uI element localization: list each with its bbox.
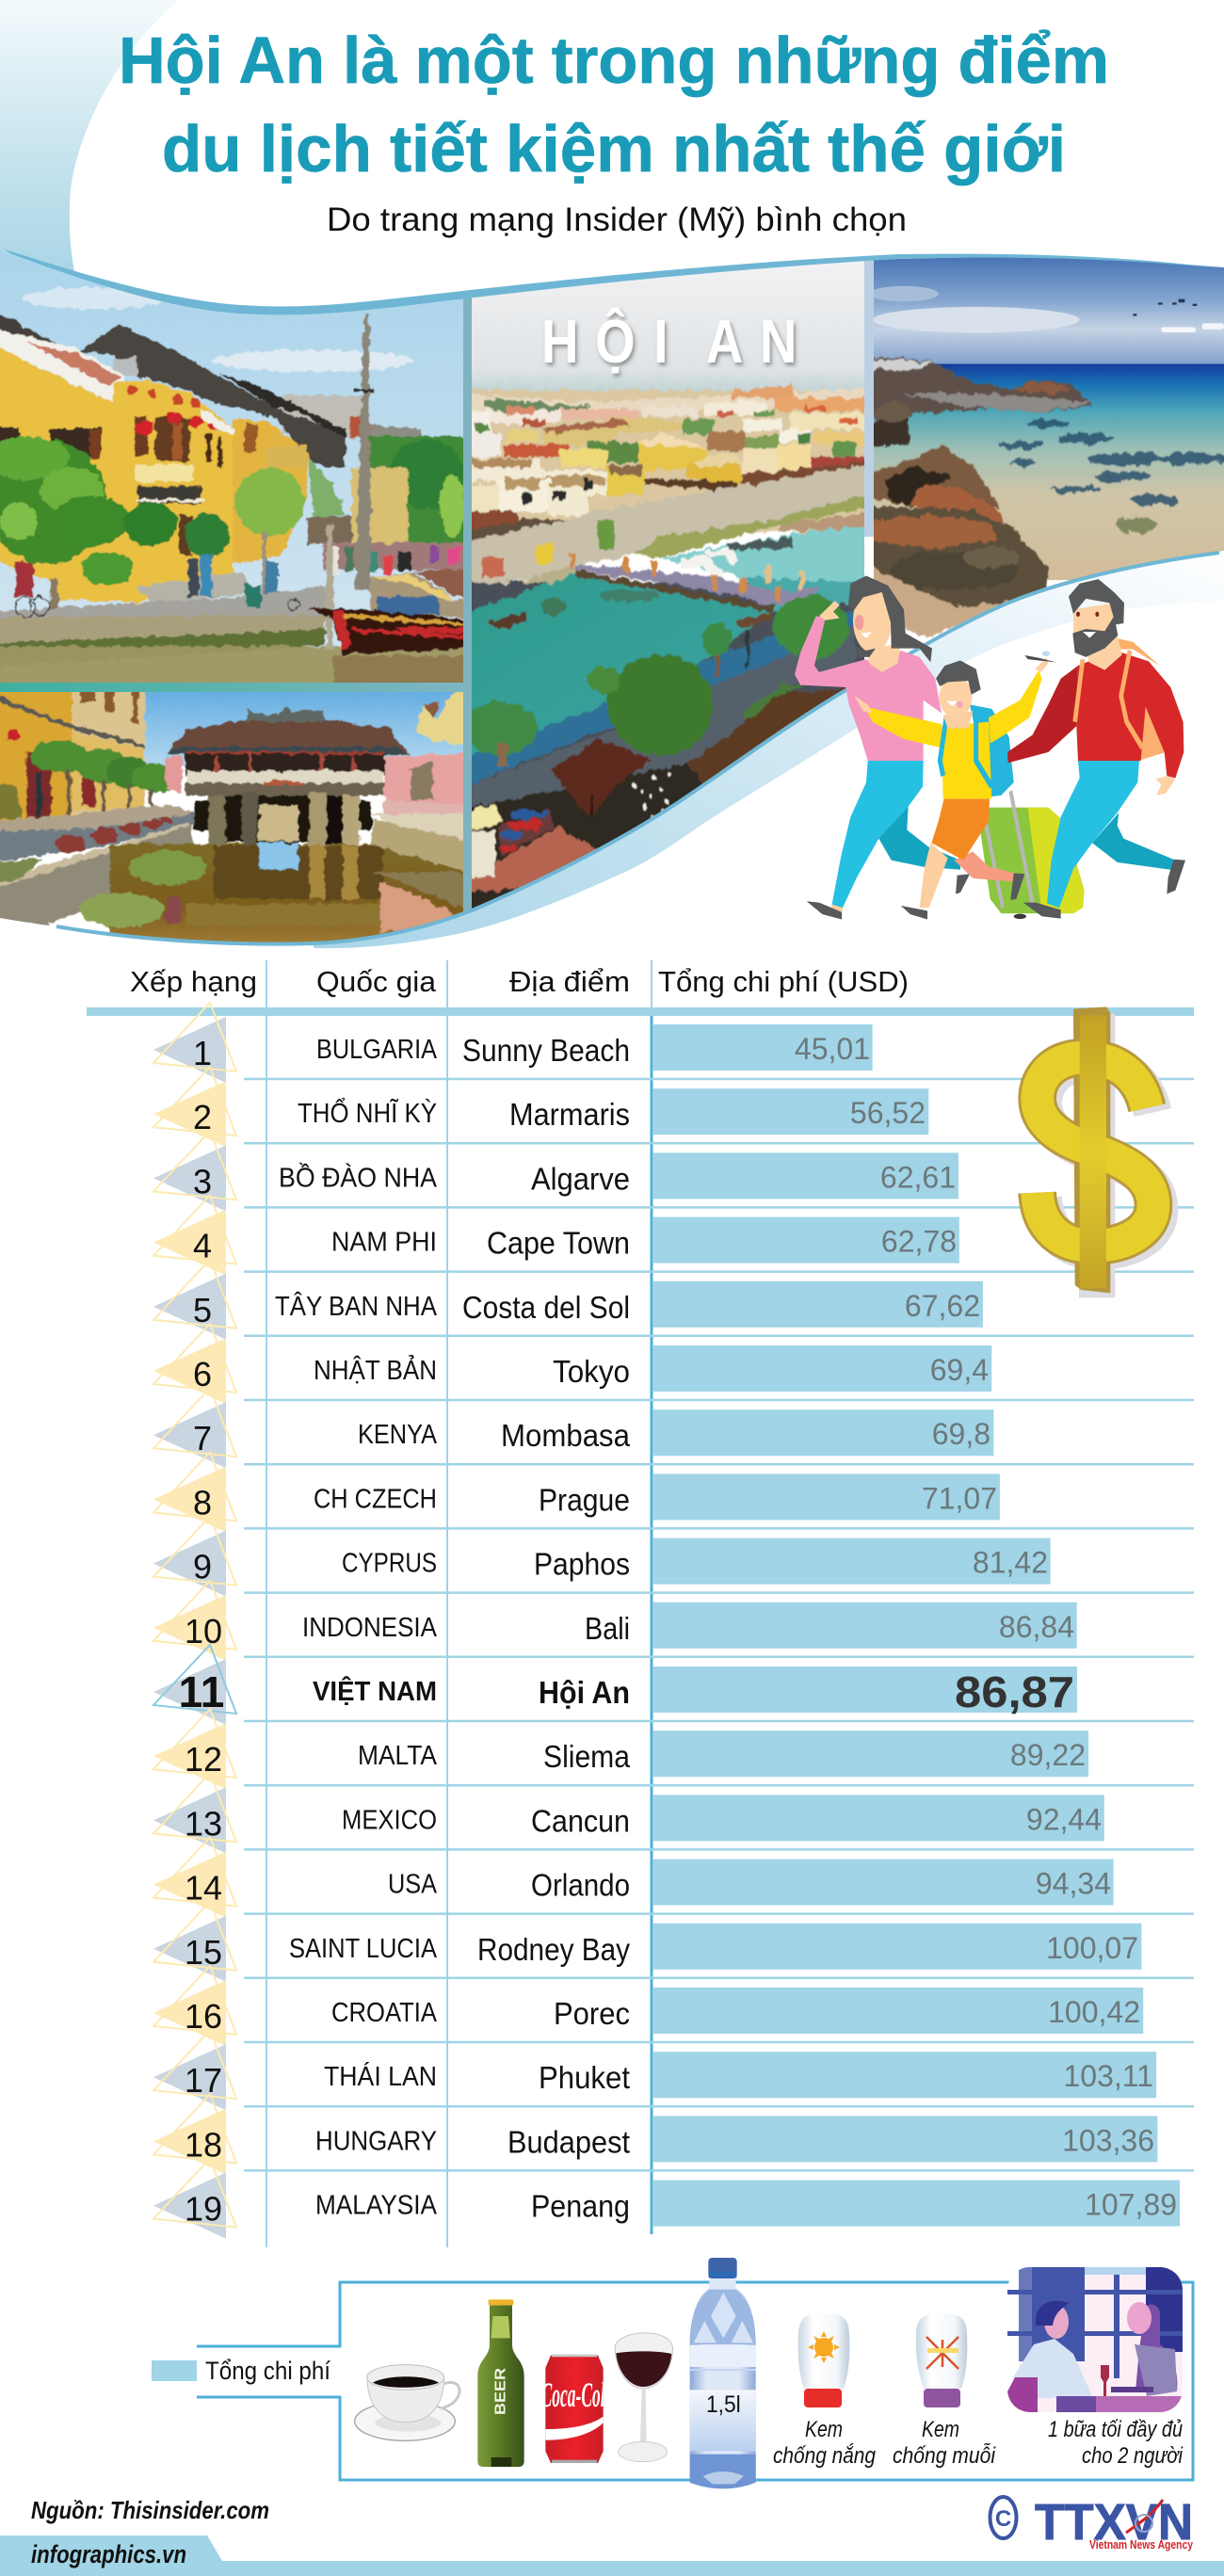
row 18 Hungary: Budapest [507, 2124, 630, 2159]
label: mosquito repellent: chống muỗi [893, 2442, 996, 2469]
basket icons [355, 2258, 756, 2488]
label: mosquito repellent: Kem [922, 2417, 959, 2442]
top-left gradient corner [0, 0, 179, 276]
label: dinner: cho 2 người [1082, 2443, 1184, 2469]
row 5 Spain: TÂY BAN NHA [275, 1291, 438, 1322]
basket icons: Coca-Cola [541, 2376, 613, 2415]
row 3 Portugal: BỒ ĐÀO NHA [279, 1161, 438, 1193]
row 17 Thailand: Phuket [539, 2060, 630, 2095]
icon: soda can [545, 2354, 604, 2463]
row 15 Saint Lucia: 100,07 [1046, 1931, 1138, 1965]
row 3 Portugal: 3 [193, 1162, 212, 1200]
row 17 Thailand: THÁI LAN [324, 2061, 437, 2092]
row 7 Kenya: KENYA [358, 1420, 438, 1450]
logo: TTXVN: TTXVN [1035, 2494, 1193, 2551]
row 3 Portugal [153, 1131, 958, 1211]
website credit: infographics.vn [31, 2540, 186, 2568]
icon: gold dollar sign [1038, 1006, 1159, 1297]
row 18 Hungary: HUNGARY [315, 2126, 437, 2156]
row 6 Japan: NHẬT BẢN [314, 1354, 437, 1386]
row 6 Japan: Tokyo [553, 1354, 630, 1389]
source credit: Nguồn: Thisinsider.com [31, 2496, 269, 2524]
row 7 Kenya: Mombasa [501, 1418, 631, 1453]
row 16 Croatia: CROATIA [331, 1998, 438, 2028]
row 7 Kenya: 7 [193, 1419, 212, 1457]
row 4 South Africa: NAM PHI [331, 1228, 437, 1258]
row 5 Spain: 5 [193, 1291, 212, 1329]
row 11 Viet Nam highlighted [153, 1645, 1077, 1725]
row 7 Kenya [153, 1388, 993, 1468]
row 17 Thailand [153, 2030, 1156, 2110]
row 1 Bulgaria: 1 [193, 1034, 212, 1072]
row 4 South Africa: Cape Town [487, 1226, 630, 1261]
row 15 Saint Lucia [153, 1902, 1141, 1982]
row 13 Mexico: Cancun [531, 1803, 630, 1838]
row 1 Bulgaria: 45,01 [795, 1032, 870, 1066]
row 14 USA: 94,34 [1036, 1867, 1111, 1901]
row 2 Turkey: 2 [193, 1098, 212, 1136]
row 4 South Africa [153, 1196, 959, 1276]
row 12 Malta: 12 [185, 1740, 222, 1779]
man traveller [1007, 579, 1185, 919]
icon: sunscreen tube [798, 2313, 849, 2407]
row 10 Indonesia: 86,84 [999, 1610, 1074, 1644]
photo gaps [0, 254, 874, 932]
photo: Japanese covered bridge [0, 684, 477, 951]
row 7 Kenya: 69,8 [932, 1417, 990, 1451]
row 8 Czech: 8 [193, 1483, 212, 1521]
table header: Tổng chi phí (USD) [658, 965, 909, 998]
row 19 Malaysia: 107,89 [1085, 2188, 1177, 2222]
label: dinner: 1 bữa tối đầy đủ [1048, 2417, 1183, 2442]
title: Hội An là một trong những điểm [119, 24, 1109, 97]
table header [130, 965, 909, 998]
row 5 Spain: Costa del Sol [462, 1290, 630, 1325]
legend swatch [152, 2360, 197, 2381]
row 8 Czech: CH CZECH [314, 1484, 437, 1514]
row 14 USA: 14 [185, 1869, 222, 1908]
row 5 Spain: 67,62 [905, 1289, 980, 1323]
row 6 Japan [153, 1324, 991, 1404]
legend frame [197, 2282, 1193, 2480]
child traveller [854, 651, 1056, 920]
row 8 Czech [153, 1452, 1000, 1532]
row 10 Indonesia: Bali [585, 1611, 630, 1646]
row 2 Turkey: 56,52 [850, 1096, 926, 1130]
logo: TTXVN: C [995, 2506, 1011, 2532]
row 15 Saint Lucia: Rodney Bay [477, 1932, 630, 1967]
family of travellers illustration [795, 575, 1185, 920]
top white wave [0, 0, 1224, 313]
row 6 Japan: 69,4 [930, 1353, 989, 1387]
row 12 Malta: Sliema [543, 1739, 631, 1774]
suitcase [981, 791, 1085, 919]
row 2 Turkey: Marmaris [509, 1097, 630, 1132]
row 10 Indonesia: INDONESIA [302, 1613, 438, 1643]
table header: Địa điểm [509, 965, 630, 998]
row 12 Malta: MALTA [358, 1741, 438, 1771]
row 10 Indonesia [153, 1581, 1077, 1661]
bottom curve band under photos [0, 551, 1224, 960]
label: sunscreen [773, 2417, 877, 2469]
label: sunscreen: chống nắng [773, 2443, 877, 2469]
row 10 Indonesia: 10 [185, 1612, 222, 1650]
label: mosquito repellent [893, 2417, 996, 2469]
row 9 Cyprus: CYPRUS [342, 1549, 437, 1579]
row 14 USA [153, 1838, 1114, 1918]
row 6 Japan: 6 [193, 1355, 212, 1393]
table frame [87, 960, 1194, 2247]
label: sunscreen: Kem [805, 2417, 843, 2442]
title: du lịch tiết kiệm nhất thế giới [162, 112, 1066, 185]
row 11 Viet Nam highlighted: 86,87 [955, 1667, 1074, 1716]
row 14 USA: USA [388, 1870, 438, 1900]
row 1 Bulgaria: BULGARIA [316, 1035, 438, 1065]
row 11 Viet Nam highlighted: VIỆT NAM [313, 1675, 437, 1707]
icon: beer bottle: BEER [493, 2368, 509, 2415]
row 1 Bulgaria: Sunny Beach [462, 1033, 630, 1068]
photo: aerial view of Hoi An river [459, 255, 878, 927]
row 11 Viet Nam highlighted: 11 [179, 1667, 224, 1716]
photo: rocky seashore [866, 247, 1224, 637]
row 16 Croatia: 100,42 [1048, 1995, 1140, 2029]
row 3 Portugal: 62,61 [880, 1160, 956, 1194]
row 19 Malaysia: 19 [185, 2190, 222, 2229]
row 13 Mexico: 92,44 [1026, 1802, 1102, 1836]
icon: beer bottle [477, 2299, 524, 2467]
icon: water bottle: 1,5l [706, 2391, 741, 2418]
row 3 Portugal: Algarve [531, 1161, 630, 1196]
row 12 Malta: 89,22 [1010, 1738, 1086, 1772]
row 9 Cyprus: Paphos [534, 1547, 630, 1582]
row 14 USA: Orlando [531, 1868, 630, 1903]
row 12 Malta [153, 1709, 1088, 1789]
row 15 Saint Lucia: 15 [185, 1933, 222, 1972]
row 18 Hungary: 103,36 [1062, 2123, 1154, 2157]
row 8 Czech: Prague [539, 1482, 630, 1517]
row 4 South Africa: 62,78 [881, 1225, 957, 1259]
row 17 Thailand: 17 [185, 2061, 222, 2100]
photo: Hoi An riverside street [0, 238, 483, 690]
row 19 Malaysia [153, 2159, 1180, 2239]
icon: dinner for two [1007, 2267, 1183, 2412]
row 17 Thailand: 103,11 [1064, 2059, 1153, 2093]
row 4 South Africa: 4 [193, 1227, 212, 1265]
footer band [0, 2536, 1224, 2576]
row 16 Croatia: Porec [554, 1996, 630, 2031]
row 9 Cyprus: 81,42 [973, 1546, 1048, 1580]
icon: water bottle [690, 2258, 756, 2488]
icon: coffee cup [355, 2365, 459, 2440]
row 18 Hungary [153, 2094, 1157, 2174]
legend label: Tổng chi phí [205, 2357, 330, 2385]
row 13 Mexico: MEXICO [342, 1805, 437, 1835]
row 2 Turkey [153, 1067, 928, 1147]
table header: Quốc gia [316, 965, 437, 998]
row 1 Bulgaria [153, 1003, 873, 1083]
row 16 Croatia: 16 [185, 1997, 222, 2036]
row 5 Spain [153, 1260, 983, 1340]
row 16 Croatia [153, 1966, 1143, 2046]
row 19 Malaysia: Penang [531, 2189, 630, 2224]
icon: wine glass [615, 2333, 672, 2462]
row 13 Mexico [153, 1773, 1104, 1853]
row 9 Cyprus: 9 [193, 1548, 212, 1586]
row 19 Malaysia: MALAYSIA [315, 2191, 438, 2221]
row 13 Mexico: 13 [185, 1804, 222, 1843]
row 15 Saint Lucia: SAINT LUCIA [289, 1934, 438, 1964]
row 18 Hungary: 18 [185, 2125, 222, 2164]
table header: Xếp hạng [130, 965, 257, 998]
blue wave ribbon [5, 250, 1224, 314]
woman traveller [795, 575, 970, 920]
row 2 Turkey: THỔ NHĨ KỲ [298, 1097, 437, 1129]
row 11 Viet Nam highlighted: Hội An [539, 1675, 630, 1710]
title [119, 24, 1109, 185]
logo: TTXVN: Vietnam News Agency [1089, 2537, 1194, 2552]
row 8 Czech: 71,07 [922, 1481, 997, 1515]
photo title: HOI AN: HỘI AN [541, 308, 797, 376]
row 9 Cyprus [153, 1517, 1051, 1597]
icon: mosquito repellent tube [916, 2313, 967, 2407]
subtitle: Do trang mạng Insider (Mỹ) bình chọn [327, 201, 907, 238]
label: dinner [1048, 2417, 1184, 2469]
